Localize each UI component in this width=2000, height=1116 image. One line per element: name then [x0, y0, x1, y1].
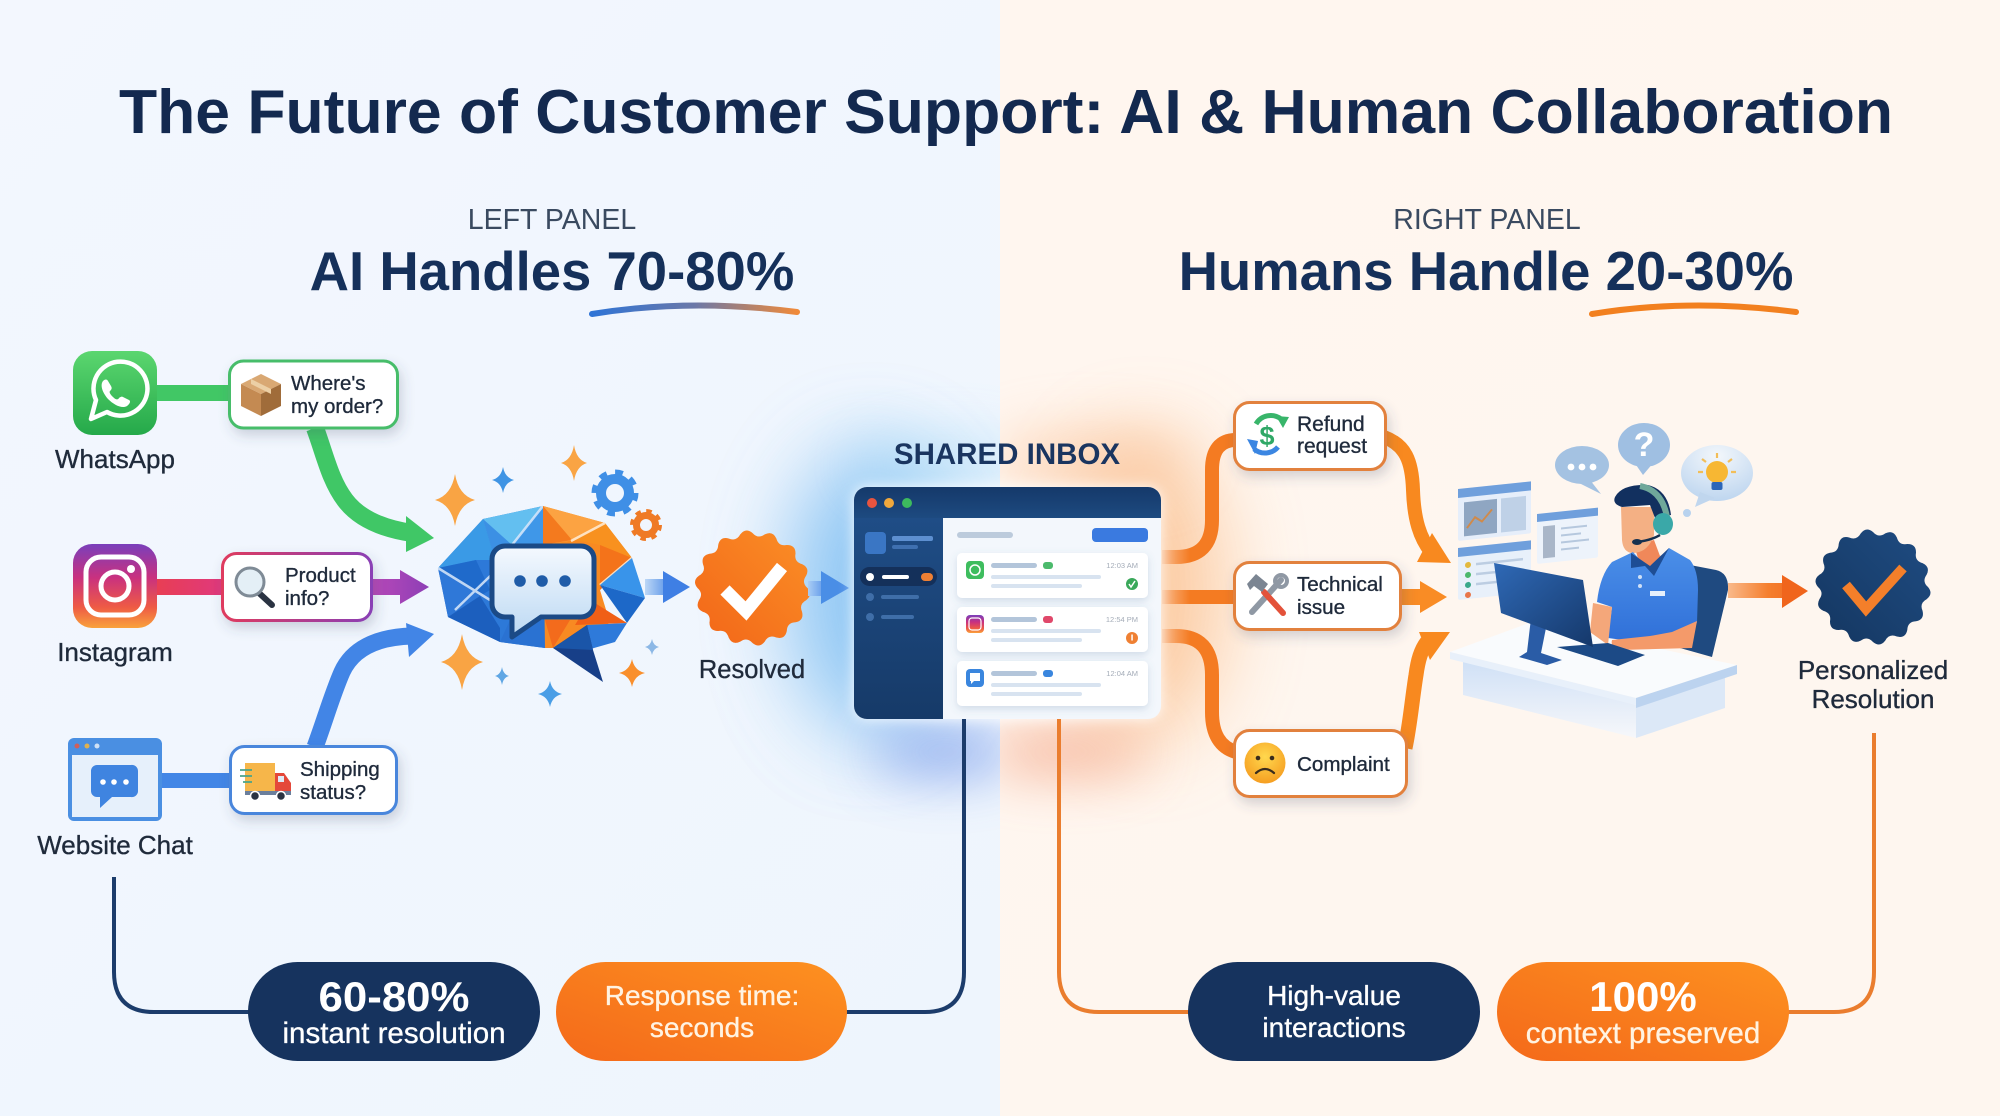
icon: personalized resolution badge — [1815, 529, 1931, 645]
icon: orange gear — [632, 512, 660, 538]
bubble: where's my order: Where's — [291, 372, 366, 395]
inbox: WhatsApp message card — [957, 553, 1148, 598]
stat pill: context preserved — [1497, 962, 1789, 1061]
icon: magnifier — [236, 568, 272, 605]
inbox: title bar — [854, 487, 1161, 518]
connector: context preserved to resolution — [1788, 733, 1874, 1012]
bubble: shipping status: Shipping — [300, 758, 380, 781]
stat pill: instant resolution: 60-80% — [318, 973, 470, 1020]
label: Resolved: Resolved — [699, 656, 805, 684]
heading: left panel: LEFT PANEL — [468, 204, 636, 236]
bubble: technical issue: issue — [1297, 596, 1345, 619]
bubble: where's my order — [230, 361, 398, 428]
heading: right panel: RIGHT PANEL — [1393, 204, 1581, 236]
label: Shared Inbox: SHARED INBOX — [894, 438, 1120, 471]
icon: resolved badge — [695, 530, 810, 646]
brain: blue lobe — [438, 506, 545, 648]
arrow: Instagram to bubble — [150, 579, 226, 595]
inbox: sidebar — [854, 518, 943, 719]
arrow: product question to AI — [371, 570, 429, 604]
arrow: website chat to bubble — [155, 773, 233, 788]
bubble: refund request: request — [1297, 435, 1367, 458]
icon: tools — [1247, 574, 1287, 613]
label: WhatsApp: WhatsApp — [55, 444, 175, 474]
icon: sad face — [1244, 742, 1286, 784]
brain: orange lobe — [543, 506, 632, 648]
connector: inbox to high-value interactions — [1059, 719, 1191, 1012]
bubble: refund request — [1234, 402, 1386, 470]
bubble: shipping status — [230, 746, 396, 814]
stat pill: context preserved: 100% — [1589, 973, 1697, 1020]
inbox: Instagram message card: 12:54 PM — [1106, 615, 1138, 624]
background: right peach half — [1000, 0, 2000, 1116]
panel: shared inbox window — [854, 487, 1161, 719]
arrow: shipping question to AI — [315, 623, 434, 747]
agent: chair — [1680, 565, 1728, 657]
arrow: refund to agent — [1384, 437, 1451, 563]
arrow: resolved to inbox — [808, 571, 849, 604]
icon: refund arrows: $ — [1259, 421, 1275, 451]
heading: right panel: Humans Handle 20-30% — [1179, 241, 1793, 302]
stat pill: response time: seconds — [650, 1012, 754, 1043]
agent: keyboard — [1557, 643, 1645, 666]
connector: response time to inbox — [845, 719, 964, 1012]
agent: floating windows — [1458, 481, 1598, 600]
connector: website chat to instant resolution — [114, 877, 250, 1012]
bubble: where's my order: my order? — [291, 395, 383, 418]
inbox: header controls — [957, 528, 1148, 542]
icon: WhatsApp — [73, 351, 157, 435]
bubble: product info — [222, 554, 372, 620]
title: The Future of Customer Support: AI & Human Collaboration — [119, 78, 1893, 147]
arrow: WhatsApp to bubble — [150, 385, 234, 401]
stat pill: context preserved: context preserved — [1526, 1017, 1760, 1050]
agent: polo shirt — [1597, 548, 1698, 645]
inbox: sidebar items — [860, 532, 937, 621]
icon: Instagram — [73, 544, 157, 628]
agent: desk — [1450, 622, 1737, 738]
bubble: product info: info? — [285, 587, 329, 610]
arrow: agent to personalized resolution — [1728, 575, 1808, 608]
icon: parcel — [241, 374, 281, 416]
path: inbox to complaint — [1162, 636, 1236, 752]
arrow: technical to agent — [1399, 581, 1447, 613]
bubble: product info: Product — [285, 564, 356, 587]
stat pill: high-value interactions: High-value — [1267, 980, 1401, 1011]
bubble: technical issue — [1234, 562, 1400, 630]
bubble: refund request: Refund — [1297, 413, 1365, 436]
inbox: chat message card: 12:04 AM — [1106, 669, 1138, 678]
label: Website Chat: Website Chat — [37, 830, 194, 860]
stat pill: high-value interactions — [1188, 962, 1480, 1061]
bubble: complaint: Complaint — [1297, 753, 1390, 776]
bubble: shipping status: status? — [300, 781, 366, 804]
agent: question bubble: ? — [1634, 426, 1654, 464]
icon: delivery truck — [240, 763, 291, 800]
agent: head and headset — [1614, 485, 1673, 575]
panel: human routing paths — [1162, 402, 1451, 796]
stat pill: response time — [556, 962, 847, 1061]
label: Personalized Resolution: Personalized — [1798, 655, 1948, 685]
label: Instagram: Instagram — [57, 637, 173, 667]
inbox: window controls — [867, 498, 912, 508]
agent: thought bubble dots — [1555, 446, 1609, 494]
stat pill: high-value interactions: interactions — [1262, 1012, 1406, 1043]
inbox: chat message card — [957, 661, 1148, 706]
agent: arms — [1590, 603, 1697, 650]
icon: AI brain with chat bubble — [435, 445, 660, 707]
agent: question bubble — [1618, 423, 1670, 475]
path: inbox to technical — [1162, 590, 1236, 604]
brain: right blue facets — [553, 558, 645, 682]
arrow: order question to AI — [315, 428, 434, 552]
path: inbox to refund — [1162, 440, 1236, 557]
arrow: complaint to agent — [1405, 632, 1450, 748]
arrow: AI to resolved — [645, 571, 690, 603]
icon: refund arrows — [1247, 416, 1289, 454]
stat pill: instant resolution: instant resolution — [282, 1017, 506, 1050]
icon: website chat window — [68, 738, 162, 821]
bubble: complaint — [1234, 730, 1406, 796]
bubble: technical issue: Technical — [1297, 573, 1383, 596]
stat pill: instant resolution — [248, 962, 540, 1061]
sparkles — [435, 445, 659, 707]
icon: blue gear — [595, 473, 635, 513]
label: Personalized Resolution: Resolution — [1812, 684, 1934, 714]
agent: idea bubble — [1681, 445, 1753, 517]
panel: AI channel flows — [37, 351, 849, 860]
agent: monitor — [1494, 563, 1593, 665]
label: Personalized Resolution — [1798, 655, 1948, 714]
background: left blue half — [0, 0, 1000, 1116]
inbox: WhatsApp message card: 12:03 AM — [1106, 561, 1138, 570]
stat pill: response time: Response time: — [605, 980, 799, 1011]
heading: left panel — [310, 204, 797, 314]
heading: right panel — [1179, 204, 1796, 314]
glow: orange side of shared inbox — [980, 432, 1220, 774]
glow: blue side of shared inbox — [787, 439, 1035, 774]
heading: left panel: AI Handles 70-80% — [310, 241, 794, 302]
inbox: Instagram message card — [957, 607, 1148, 652]
brain: chat bubble — [492, 546, 594, 637]
illustration: support agent at desk — [1450, 423, 1753, 738]
